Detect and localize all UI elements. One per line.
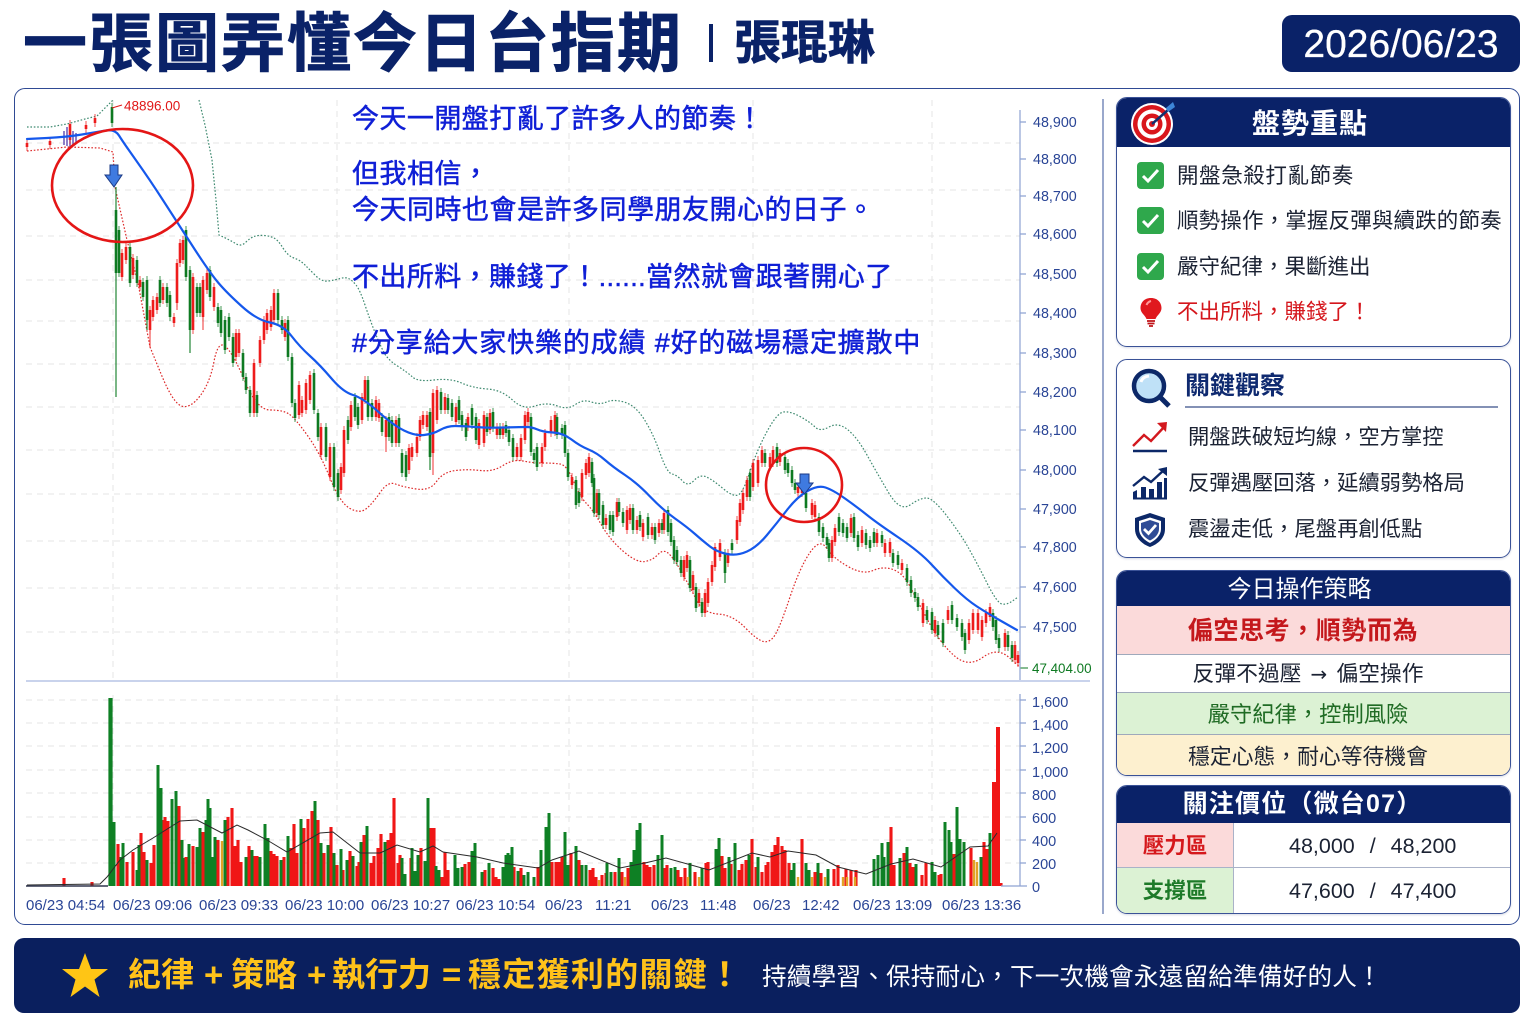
check item 1 <box>1137 162 1354 189</box>
strategy row: action: 反彈不過壓 → 偏空操作 <box>1192 661 1424 686</box>
price axis: 47,900 <box>1033 502 1077 518</box>
banner slogan: 紀律 <box>128 956 194 993</box>
resistance values: 48,000 / 48,200 <box>1289 834 1456 858</box>
observation 1 <box>1132 422 1444 452</box>
panel: key observations <box>1116 359 1511 558</box>
time axis: 06/23 10:27 <box>371 897 450 914</box>
section heading: 關鍵觀察 <box>1185 372 1285 400</box>
icon: magnifier <box>1132 368 1171 408</box>
icon: growth bars <box>1132 467 1167 500</box>
lower band <box>27 147 1020 667</box>
green candles <box>112 103 1012 662</box>
frame divider <box>1102 99 1104 914</box>
time axis: 06/23 10:54 <box>456 897 535 914</box>
price axis: 48,800 <box>1033 152 1077 168</box>
icon: check <box>1137 162 1164 189</box>
red circle: opening drop <box>52 129 193 242</box>
volume baseline <box>26 885 108 887</box>
check item 3 <box>1137 253 1371 280</box>
commentary line 5: #分享給大家快樂的成績 #好的磁場穩定擴散中 <box>352 328 921 358</box>
title divider bar <box>709 24 713 62</box>
time axis: 12:42 <box>802 897 840 914</box>
time axis: 06/23 <box>545 897 583 914</box>
time axis: 06/23 10:00 <box>285 897 364 914</box>
volume axis: 1,000 <box>1032 765 1068 781</box>
strategy row: bias <box>1117 606 1510 654</box>
strategy row: bias: 偏空思考，順勢而為 <box>1188 617 1418 645</box>
volume moving average <box>27 820 997 885</box>
moving average line <box>27 130 1017 630</box>
price axis: 48,500 <box>1033 267 1077 283</box>
icon: star <box>62 953 108 997</box>
support label <box>1117 868 1234 915</box>
bottom banner <box>14 938 1520 1013</box>
levels header <box>1116 785 1511 823</box>
banner slogan: + <box>307 956 326 993</box>
date badge <box>1282 15 1520 72</box>
commentary line 2: 但我相信， <box>352 159 490 189</box>
commentary line 1: 今天一開盤打亂了許多人的節奏！ <box>352 104 764 134</box>
commentary line 3: 今天同時也會是許多同學朋友開心的日子。 <box>352 195 874 225</box>
red candles <box>27 114 1018 667</box>
time axis <box>26 897 1021 914</box>
price axis: 48,900 <box>1033 115 1077 131</box>
price axis: 48,000 <box>1033 463 1077 479</box>
volume bars: red <box>64 798 1001 886</box>
item text: 不出所料，賺錢了！ <box>1177 300 1371 324</box>
banner slogan <box>128 956 742 993</box>
volume bars: green <box>114 765 990 886</box>
item text: 順勢操作，掌握反彈與續跌的節奏 <box>1177 209 1502 233</box>
volume axis: 1,200 <box>1032 741 1068 757</box>
strategy row: mindset <box>1117 734 1510 777</box>
price axis: 48,600 <box>1033 227 1077 243</box>
price axis: 48,200 <box>1033 385 1077 401</box>
volume axis: 200 <box>1032 857 1056 873</box>
icon: trend arrow <box>1132 422 1167 452</box>
observation text: 反彈遇壓回落，延續弱勢格局 <box>1188 471 1465 495</box>
volume axis: 800 <box>1032 788 1056 804</box>
item text: 開盤急殺打亂節奏 <box>1177 164 1354 188</box>
price axis: 47,500 <box>1033 620 1077 636</box>
icon: target with dart <box>1131 102 1175 145</box>
support values: 47,600 / 47,400 <box>1289 879 1456 903</box>
icon: check <box>1137 207 1164 234</box>
high price marker: 48896.00 <box>124 98 180 114</box>
time axis: 11:21 <box>595 897 631 914</box>
panel: price levels <box>1116 785 1511 914</box>
time axis: 06/23 09:33 <box>199 897 278 914</box>
volume axis: 400 <box>1032 834 1056 850</box>
price chart baseline <box>26 680 1090 682</box>
chart commentary text <box>352 104 921 358</box>
author name: 張琨琳 <box>734 16 875 69</box>
strategy row: action <box>1117 654 1510 692</box>
time axis: 06/23 <box>651 897 689 914</box>
strategy header: 今日操作策略 <box>1228 576 1372 603</box>
upper band <box>27 100 1018 604</box>
last price marker: 47,404.00 <box>1032 661 1092 676</box>
time axis: 11:48 <box>700 897 736 914</box>
observation 2 <box>1132 467 1465 500</box>
banner slogan: = <box>442 956 461 993</box>
price axis: 48,400 <box>1033 306 1077 322</box>
price axis: 48,700 <box>1033 189 1077 205</box>
time axis: 06/23 13:36 <box>942 897 1021 914</box>
arrow: breakdown <box>796 474 813 494</box>
strategy row: mindset: 穩定心態，耐心等待機會 <box>1188 744 1428 769</box>
volume axis: 1,400 <box>1032 718 1068 734</box>
panel: market highlights <box>1116 97 1511 347</box>
banner slogan: 執行力 <box>332 956 431 993</box>
volume bars: amber <box>222 841 977 886</box>
observation text: 開盤跌破短均線，空方掌控 <box>1188 425 1444 449</box>
price axis <box>1020 110 1077 680</box>
icon: shield <box>1135 513 1165 547</box>
support label: 支撐區 <box>1143 879 1207 903</box>
observation text: 震盪走低，尾盤再創低點 <box>1188 517 1422 541</box>
highlighted item <box>1140 298 1371 327</box>
resistance label: 壓力區 <box>1143 834 1207 858</box>
volume axis: 600 <box>1032 811 1056 827</box>
date badge: 2026/06/23 <box>1303 23 1499 66</box>
title: 一張圖弄懂今日台指期 <box>23 8 683 80</box>
price axis: 47,600 <box>1033 580 1077 596</box>
resistance label <box>1117 823 1234 868</box>
pre-market candles <box>64 127 76 147</box>
volume axis <box>1001 694 1068 896</box>
time axis: 06/23 <box>753 897 791 914</box>
commentary line 4: 不出所料，賺錢了！......當然就會跟著開心了 <box>352 262 893 292</box>
observation 3 <box>1135 513 1422 547</box>
panel header <box>1116 97 1511 147</box>
volume axis: 0 <box>1032 880 1040 896</box>
icon: check <box>1137 253 1164 280</box>
strategy header <box>1116 570 1511 607</box>
time axis: 06/23 04:54 <box>26 897 105 914</box>
banner slogan: 策略 <box>231 956 297 993</box>
banner slogan: + <box>204 956 223 993</box>
heading rule <box>1185 406 1498 408</box>
banner slogan: 穩定獲利的關鍵！ <box>468 956 742 993</box>
price axis: 47,800 <box>1033 540 1077 556</box>
red circle: breakdown <box>766 448 842 522</box>
levels header: 關注價位（微台07） <box>1183 790 1422 818</box>
price axis: 48,300 <box>1033 346 1077 362</box>
panel: today's strategy <box>1116 570 1511 776</box>
icon: light bulb <box>1140 298 1162 327</box>
strategy row: discipline <box>1117 692 1510 734</box>
price axis: 48,100 <box>1033 423 1077 439</box>
resistance values <box>1234 823 1511 868</box>
time axis: 06/23 13:09 <box>853 897 932 914</box>
volume axis: 1,600 <box>1032 695 1068 711</box>
arrow: opening <box>105 165 122 187</box>
strategy row: discipline: 嚴守紀律，控制風險 <box>1208 702 1408 727</box>
banner message: 持續學習、保持耐心，下一次機會永遠留給準備好的人！ <box>762 964 1382 991</box>
time axis: 06/23 09:06 <box>113 897 192 914</box>
check item 2 <box>1137 207 1502 234</box>
panel header: 盤勢重點 <box>1252 108 1368 139</box>
item text: 嚴守紀律，果斷進出 <box>1177 255 1371 279</box>
